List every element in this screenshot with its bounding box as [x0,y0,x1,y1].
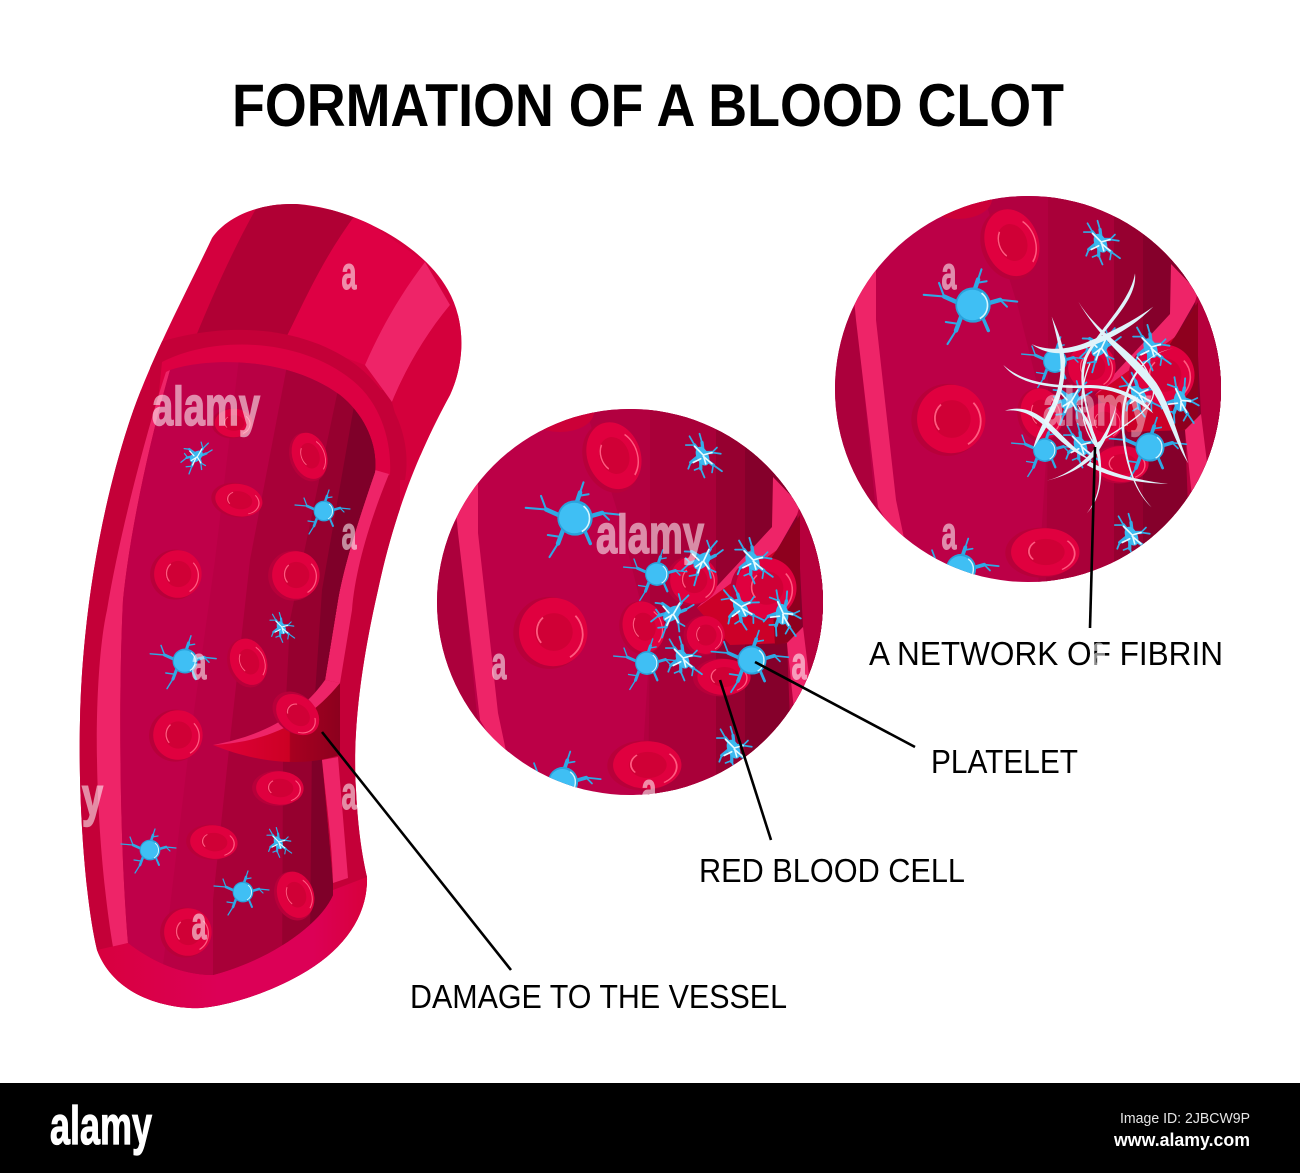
panel: platelets gathering at damage, magnified [437,409,823,795]
label: a network of fibrin: A NETWORK OF FIBRIN [869,635,1223,672]
title: FORMATION OF A BLOOD CLOT [232,72,1064,139]
stock watermarks: alamy [152,375,260,437]
vessel outer wall [70,195,470,1020]
stock watermarks: alamy [596,503,704,565]
panel: blood vessel cross-section [70,195,470,1020]
fibrin strands [1003,273,1188,513]
label: red blood cell: RED BLOOD CELL [699,852,965,889]
platelets in the vessel [121,440,350,915]
stock watermarks [0,247,1151,949]
label: platelet: PLATELET [931,743,1078,780]
magnified view contents [430,392,830,815]
footer bar [0,1083,1300,1173]
magnified view contents, shifted copy [828,179,1228,602]
leader lines [322,447,1095,970]
label: damage to the vessel: DAMAGE TO THE VESSEL [410,978,787,1015]
stock watermarks: alamy [1043,375,1151,437]
footer logo: alamy [50,1096,152,1156]
vessel damage tear [213,680,348,883]
panel: fibrin network, magnified [828,179,1228,602]
image id: Image ID: 2JBCW9P [1120,1110,1250,1127]
red blood cells in the vessel [149,408,334,958]
site url: www.alamy.com [1113,1130,1250,1150]
vessel lumen [120,362,376,975]
